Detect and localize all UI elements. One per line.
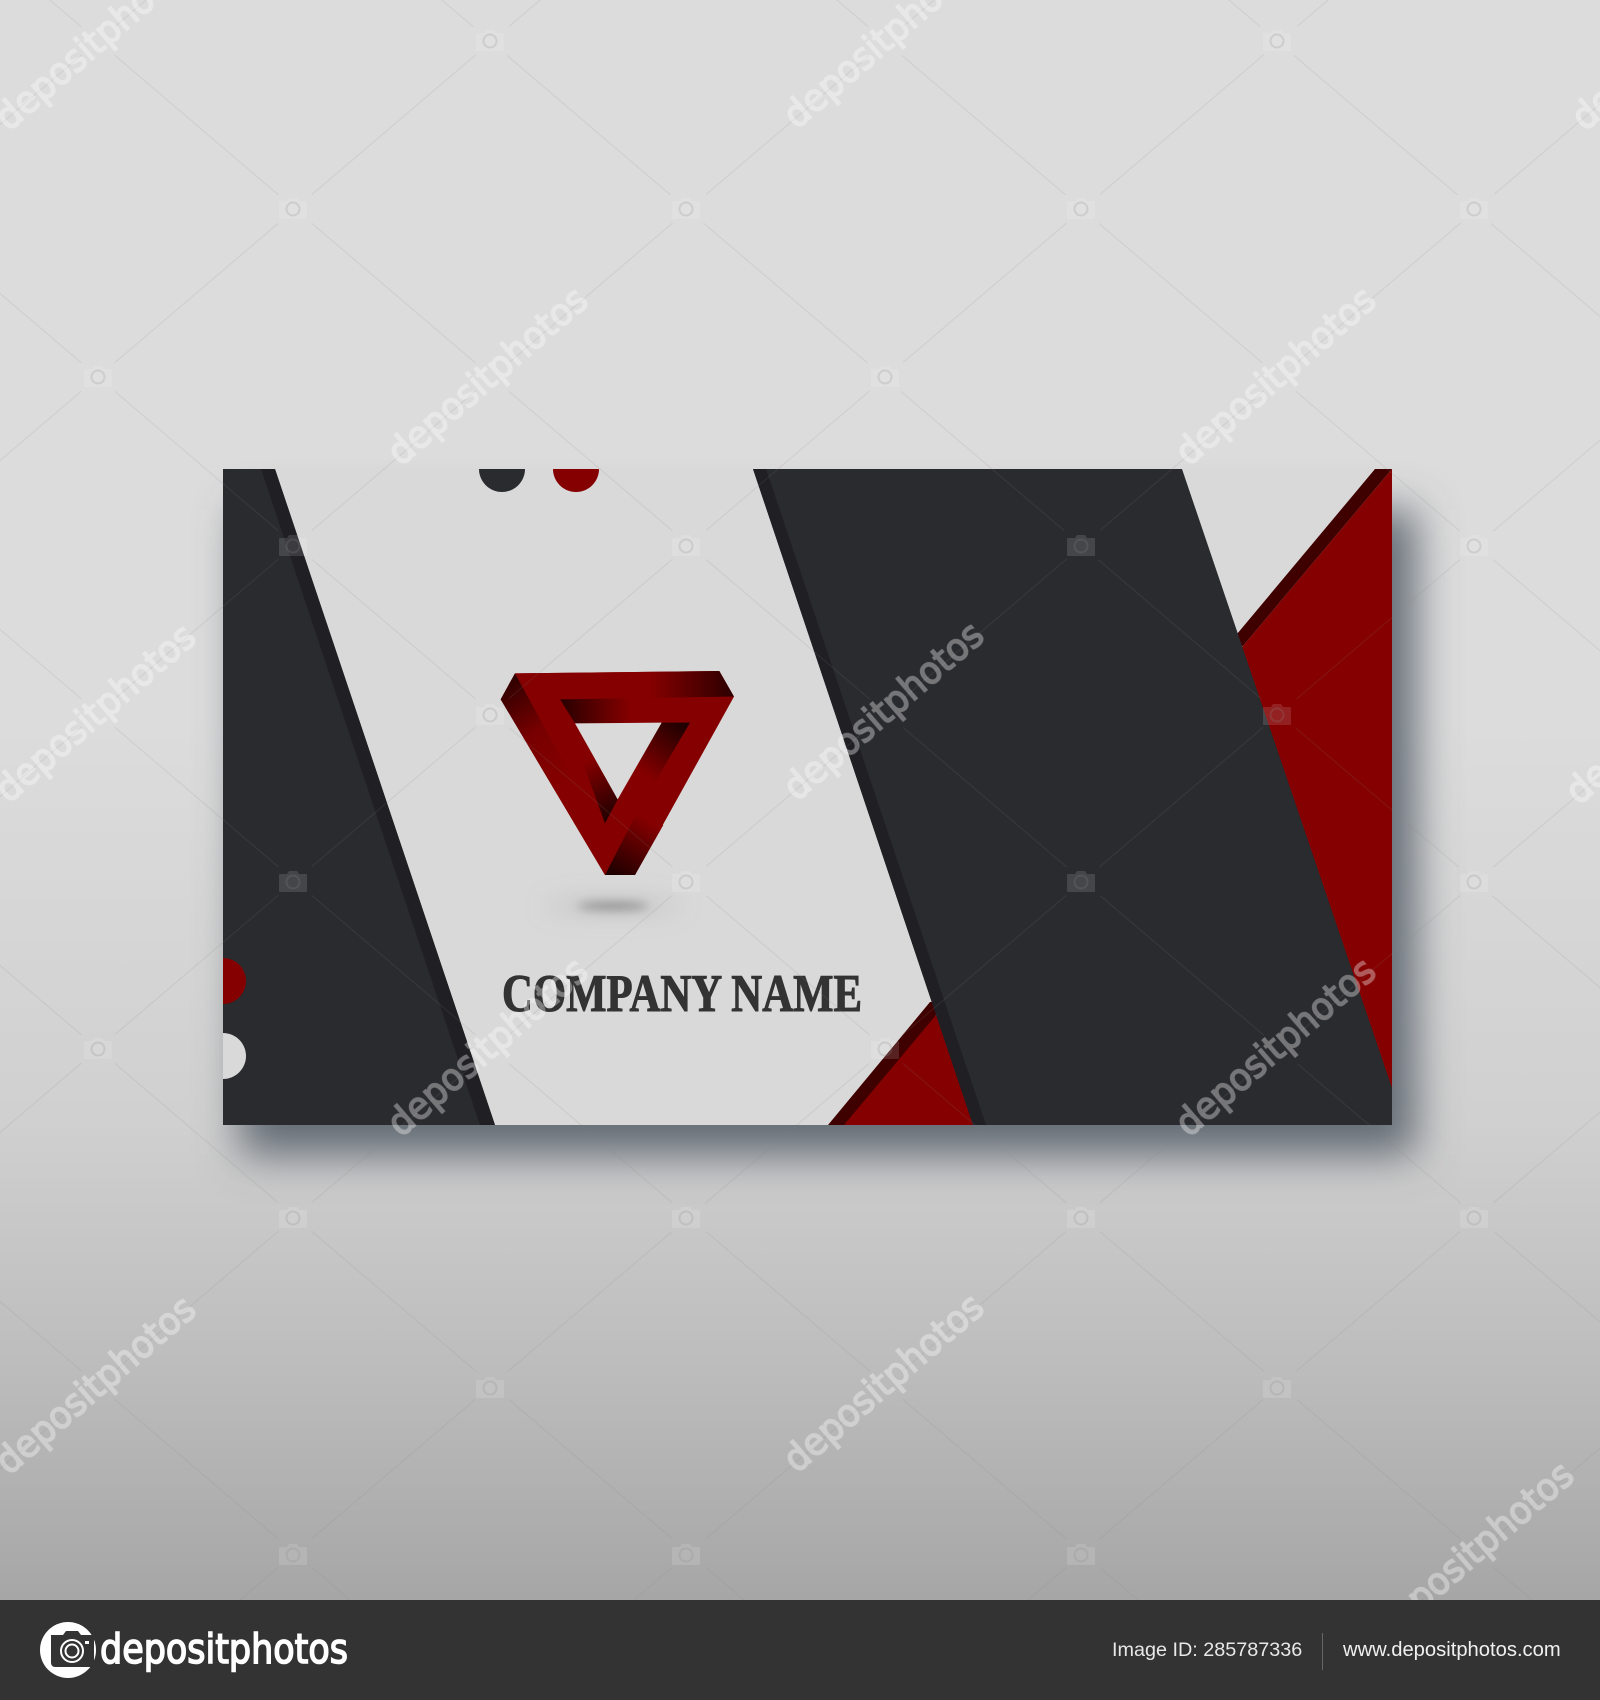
footer bar [0, 1600, 1600, 1700]
icon: camera logo [40, 1622, 96, 1678]
company name: COMPANY NAME [502, 965, 862, 1023]
watermark text: depositphotos [1167, 278, 1384, 474]
watermark text: depositphotos [775, 613, 992, 809]
panel: lower red triangle [828, 1002, 990, 1125]
half circle: red top [553, 469, 599, 492]
watermark text: depositphotos [379, 278, 596, 474]
image id: Image ID: 285787336 [1112, 1639, 1302, 1661]
logo: impossible triangle [501, 671, 734, 875]
half circle: red left [223, 958, 246, 1004]
website url: www.depositphotos.com [1342, 1639, 1561, 1661]
half circle: dark top [479, 469, 525, 492]
logo wordmark: depositphotos [100, 1625, 348, 1673]
card drop shadow [240, 510, 1416, 1155]
business card [223, 469, 1392, 1125]
watermark text: depositphotos [1167, 949, 1384, 1145]
panel: left dark [223, 469, 495, 1125]
watermark camera icons [84, 30, 1488, 1565]
panel: upper right red triangle [1200, 469, 1392, 1100]
panel: middle dark [753, 469, 1392, 1125]
logo shadow [543, 898, 683, 914]
card base [223, 469, 1392, 1125]
watermark text: depositphotos [1365, 1453, 1582, 1649]
half circle: light left [223, 1033, 246, 1079]
watermark text: depositphotos [775, 1285, 992, 1481]
watermark text: depositphotos [379, 949, 596, 1145]
